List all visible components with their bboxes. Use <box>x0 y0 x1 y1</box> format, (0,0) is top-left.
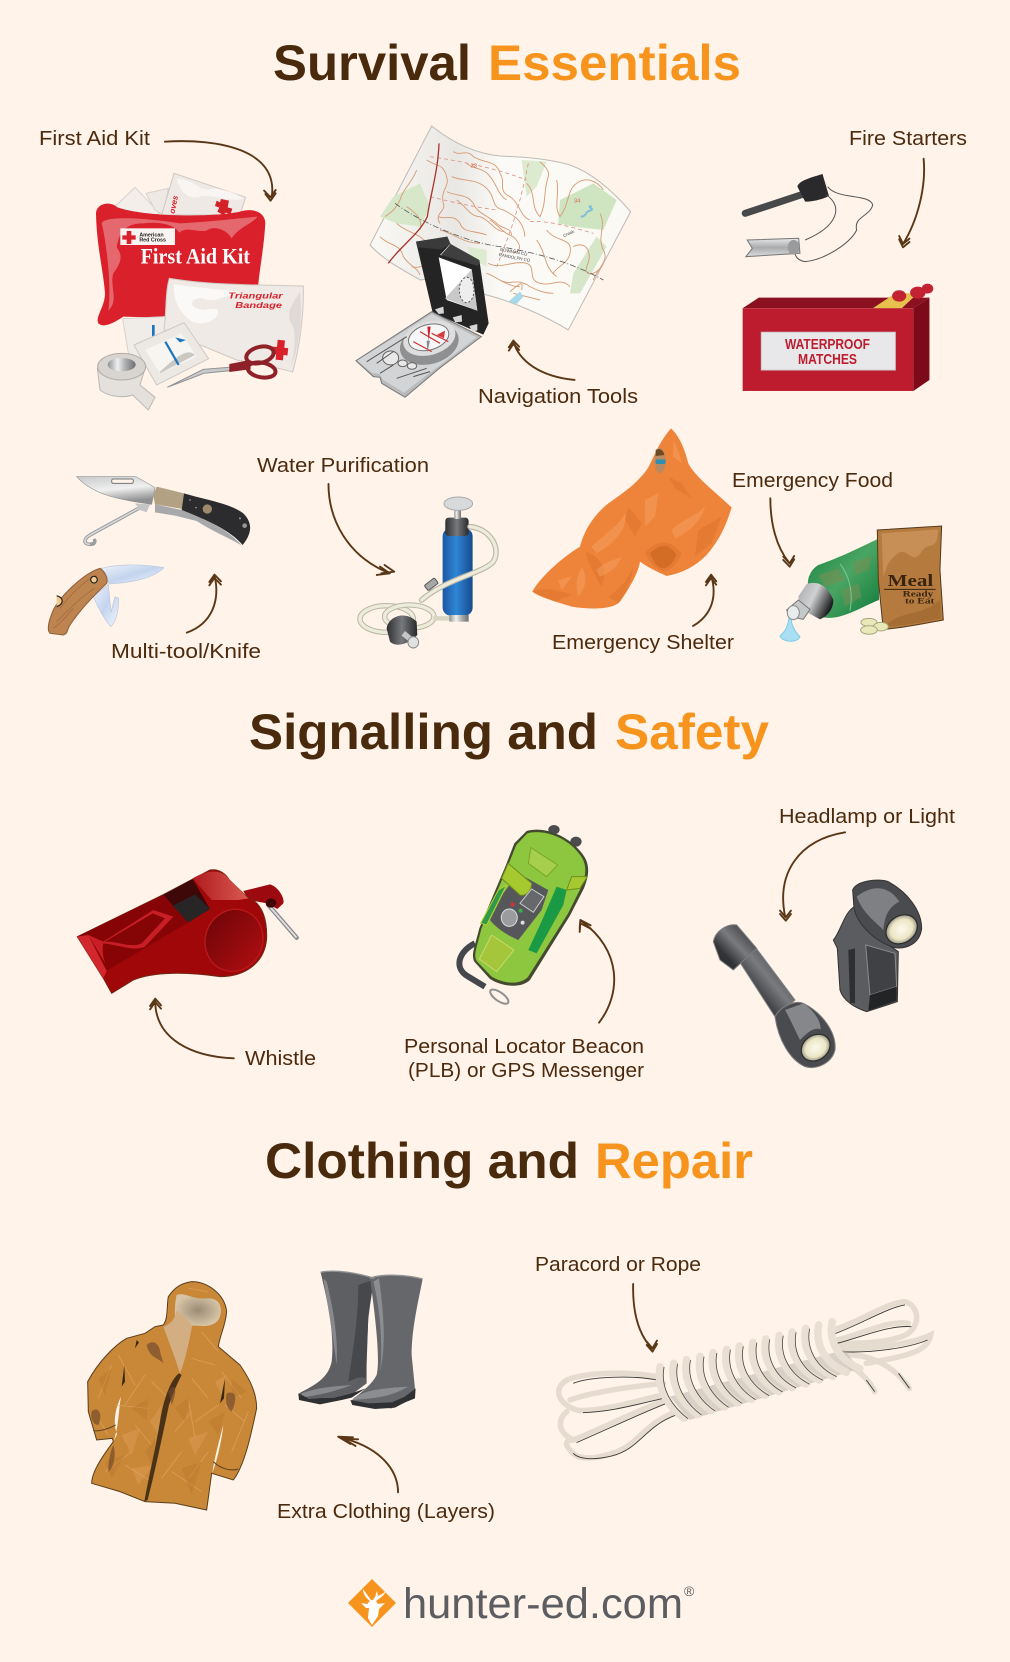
compass dial <box>395 316 464 371</box>
matches <box>873 284 933 308</box>
pouch text: to Eat <box>905 597 935 606</box>
right sole <box>350 1388 416 1409</box>
illustration: headlamp <box>833 880 923 1012</box>
illustration: jacket <box>88 1282 257 1510</box>
side grip <box>528 887 567 953</box>
tube neck <box>798 583 833 619</box>
map labels: 33 <box>471 163 477 169</box>
bag window with face <box>655 448 666 473</box>
handle rivet <box>91 576 97 583</box>
label: Whistle: Whistle <box>245 1048 316 1070</box>
arrow: paracord <box>633 1284 657 1352</box>
lanyard hole <box>266 898 276 908</box>
left boot <box>299 1271 374 1398</box>
pouch label: American Red Cross: American <box>139 232 164 238</box>
tube band <box>840 564 851 611</box>
carabiner <box>488 987 511 1006</box>
coil wrap shadows <box>663 1329 837 1419</box>
label: Emergency Food: Emergency Food <box>732 470 893 492</box>
label: Personal Locator Beacon <box>404 1036 644 1082</box>
jacket body <box>88 1282 257 1510</box>
title: Survival Essentials: Survival <box>273 35 471 91</box>
control panel <box>490 873 548 940</box>
packet: triangular bandage <box>164 278 303 372</box>
hose clip <box>424 578 438 591</box>
body <box>475 832 585 983</box>
label: First Aid Kit: First Aid Kit <box>39 128 150 150</box>
topographic map <box>370 126 631 330</box>
wood grain <box>53 575 97 628</box>
map pond <box>508 292 523 304</box>
heading: Signalling and Safety <box>249 704 769 760</box>
compass holes <box>383 351 417 369</box>
label: Water Purification: Water Purification <box>257 455 429 477</box>
screen <box>520 889 544 912</box>
coil shading <box>670 1350 860 1420</box>
outlet hose <box>422 527 496 600</box>
arrow: headlamp <box>780 832 845 921</box>
hood opening <box>175 1294 221 1326</box>
box text: WATERPROOF <box>785 336 870 353</box>
lamp lens <box>880 909 923 950</box>
body shadow <box>473 830 588 986</box>
handle pin <box>203 504 212 514</box>
upper window <box>528 848 558 877</box>
illustration: boots <box>298 1271 423 1409</box>
logo icon: orange diamond <box>348 1579 396 1627</box>
sound chamber <box>196 901 272 980</box>
lanyard loop <box>243 884 284 909</box>
illustration: fire starters <box>745 174 873 262</box>
bolster <box>153 487 184 509</box>
left boot shadow <box>348 1280 373 1382</box>
map grid lines <box>430 157 593 267</box>
lamp facets <box>857 888 899 930</box>
box text <box>785 336 870 368</box>
meal pouch <box>877 526 943 629</box>
pouch <box>96 204 265 325</box>
label: Navigation Tools: Navigation Tools <box>478 386 638 408</box>
side clip <box>567 877 587 890</box>
illustration: water filter <box>360 497 496 648</box>
packet: sterile pad <box>134 323 209 385</box>
logo wordmark: hunter-ed.com <box>403 1580 683 1628</box>
heading: Signalling and Safety: Signalling and <box>249 704 598 760</box>
hook tool <box>85 503 150 544</box>
collar lining <box>163 1310 192 1373</box>
key ring <box>268 905 297 938</box>
handle screws <box>189 499 247 528</box>
map county line <box>395 203 603 280</box>
bag creases <box>532 477 722 603</box>
packet: rear gauze <box>123 317 165 363</box>
packet: triangular bandage: Bandage <box>235 300 282 310</box>
box top <box>743 298 929 308</box>
gap under right sleeve <box>212 1425 223 1473</box>
right loops <box>834 1302 931 1392</box>
illustration: emergency shelter <box>532 428 732 609</box>
slot <box>848 948 855 1003</box>
lanyard <box>459 943 485 987</box>
lanyard cord <box>795 187 873 262</box>
pouch text: Ready <box>903 589 934 598</box>
packet: gloves <box>162 173 246 215</box>
barrel <box>737 947 795 1017</box>
pump neck <box>445 518 469 536</box>
label: Multi-tool/Knife: Multi-tool/Knife <box>111 641 261 663</box>
left grip <box>481 885 507 925</box>
scissors <box>167 344 277 387</box>
packet: triangular bandage: Triangular <box>228 290 284 300</box>
ferro rod <box>745 194 804 213</box>
blue cylinder <box>443 528 473 616</box>
hose coil <box>360 605 450 632</box>
strap <box>502 863 532 895</box>
map labels: BOWMAN CO <box>500 247 529 257</box>
dark stains <box>91 1342 235 1472</box>
map contour lines <box>380 152 605 300</box>
title: Survival Essentials <box>273 35 741 91</box>
map labels <box>471 163 580 263</box>
mouth floor <box>173 894 210 922</box>
antennas <box>548 825 582 847</box>
hose weight <box>387 616 419 648</box>
map labels: Creek <box>562 228 576 238</box>
top surface <box>77 895 188 972</box>
arrow: emergency food <box>770 498 794 567</box>
registered mark: ® <box>684 1583 695 1599</box>
steel back <box>155 504 242 546</box>
mouth opening <box>163 879 210 922</box>
whistle body <box>77 870 267 993</box>
map water <box>581 206 592 217</box>
blade hole <box>112 479 133 483</box>
camouflage texture <box>98 1288 248 1492</box>
darkest fold <box>650 546 677 568</box>
head <box>775 1002 835 1067</box>
label: Fire Starters: Fire Starters <box>849 128 967 150</box>
logo: hunter-ed.com <box>348 1579 695 1628</box>
handle notch <box>57 596 62 607</box>
metal striker <box>746 238 800 257</box>
tape roll <box>97 353 155 410</box>
pouch label: American Red Cross <box>120 228 175 245</box>
label: Emergency Shelter: Emergency Shelter <box>552 632 734 654</box>
arrow: water purification <box>328 484 394 575</box>
packet: small white gauze behind pouch <box>115 187 160 218</box>
pouch text <box>884 571 936 606</box>
lamp housing <box>853 880 922 948</box>
right loop outlines <box>834 1305 928 1392</box>
illustration: wooden knife <box>48 565 164 635</box>
left sole <box>298 1388 366 1404</box>
map labels: 34 <box>574 199 580 205</box>
pouch shading <box>882 529 938 577</box>
arrow: navigation tools <box>509 341 575 380</box>
label: Paracord or Rope: Paracord or Rope <box>535 1254 701 1276</box>
clip panel <box>866 945 897 995</box>
box text: MATCHES <box>798 351 857 368</box>
bag highlights <box>558 440 705 597</box>
pouch label: American Red Cross: Red Cross <box>139 238 166 244</box>
tube nozzle <box>787 600 810 619</box>
label: Headlamp or Light: Headlamp or Light <box>779 806 955 828</box>
right boot <box>351 1275 423 1408</box>
handle <box>182 493 250 545</box>
left boot highlights <box>302 1278 352 1398</box>
blade <box>77 477 155 504</box>
logo icon: deer <box>361 1589 386 1625</box>
lower hook blade <box>93 584 119 627</box>
arrow: fire starters <box>899 159 924 247</box>
boot rims <box>321 1271 423 1279</box>
illustration: flashlight <box>713 925 835 1067</box>
upper blade <box>102 565 164 584</box>
front zip <box>144 1373 182 1502</box>
mount <box>833 907 898 1012</box>
bag <box>532 428 732 609</box>
box label <box>761 332 895 370</box>
lower panel <box>868 987 897 1011</box>
base cap <box>449 615 469 622</box>
box side <box>913 298 929 391</box>
label: Personal Locator Beacon: (PLB) or GPS Messenger <box>408 1060 644 1082</box>
tail cap <box>713 925 757 970</box>
lower pad <box>479 935 514 972</box>
label: Extra Clothing: Extra Clothing (Layers) <box>277 1501 495 1523</box>
right boot highlights <box>353 1278 408 1400</box>
map road <box>388 143 439 263</box>
coil wraps <box>659 1322 860 1418</box>
label: Personal Locator Beacon: Personal Locator Beacon <box>404 1036 644 1058</box>
pouch lower shading <box>887 600 941 627</box>
heading: Clothing and Repair: Repair <box>595 1133 753 1189</box>
pump stem <box>454 509 461 519</box>
mouthpiece highlight <box>88 910 173 968</box>
heading: Clothing and Repair: Clothing and <box>265 1133 579 1189</box>
top shine <box>193 872 248 900</box>
arrow: emergency shelter <box>693 575 716 626</box>
water drop <box>780 617 800 641</box>
wood handle <box>48 568 107 635</box>
cuffs <box>93 1425 238 1470</box>
map labels: RANDOLPH CO <box>498 252 531 263</box>
packet: second gauze <box>146 188 168 215</box>
illustration: rope <box>559 1302 931 1459</box>
left loop outlines <box>573 1377 676 1459</box>
heading: Clothing and Repair <box>265 1133 753 1189</box>
left loops <box>559 1373 676 1458</box>
illustration: whistle <box>77 870 297 993</box>
tablets <box>861 618 888 634</box>
compass lid <box>416 237 489 335</box>
lens <box>796 1029 835 1067</box>
illustration: waterproof matches <box>743 284 933 391</box>
buttons <box>501 902 525 926</box>
illustration: folding knife <box>77 477 250 546</box>
pouch title: First Aid Kit <box>141 245 251 269</box>
gap under left sleeve <box>114 1397 121 1441</box>
seam shadows <box>122 1340 225 1403</box>
ferro handle <box>797 174 829 202</box>
illustration: emergency food <box>780 526 943 641</box>
compass scales <box>367 337 430 378</box>
heading: Signalling and Safety: Safety <box>615 704 769 760</box>
arrow: whistle <box>150 999 234 1058</box>
illustration: first aid kit <box>96 173 303 410</box>
darker recess <box>105 913 165 945</box>
arrow: extra clothing <box>338 1437 398 1492</box>
mouth front <box>77 935 107 978</box>
pouch highlights <box>102 217 257 311</box>
packet: gloves: oves <box>167 194 180 214</box>
pouch text: Meal <box>888 571 934 590</box>
compass base plate <box>356 307 481 397</box>
green tube <box>808 538 879 618</box>
illustration: personal locator beacon <box>459 825 588 1006</box>
illustration: map and compass <box>356 126 631 397</box>
arrow: multi-tool <box>187 575 221 633</box>
tube mottling <box>818 557 872 607</box>
title: Survival Essentials: Essentials <box>488 35 741 91</box>
arrow: PLB <box>580 920 614 1023</box>
map vegetation <box>558 183 617 230</box>
head facets <box>785 1003 821 1040</box>
arrow: First Aid Kit <box>165 141 276 201</box>
box front <box>743 308 913 391</box>
pump knob <box>444 497 473 510</box>
